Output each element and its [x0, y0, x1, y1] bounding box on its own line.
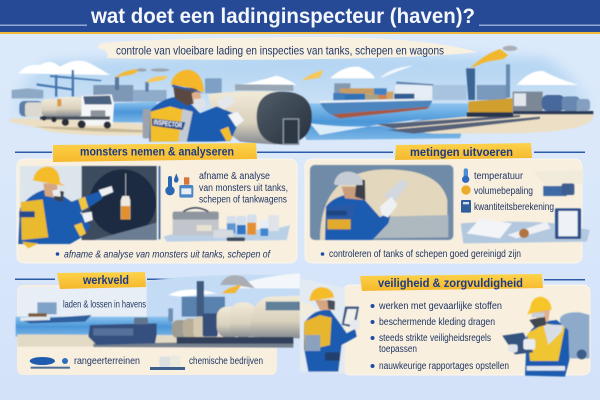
illustration: tank interior with worker: [310, 165, 453, 240]
subtitle banner: controle van vloeibare lading en inspecties van tanks, schepen en wagons: [116, 44, 444, 58]
hero inspector: [143, 70, 244, 142]
text: rangeerterreinen: rangeerterreinen: [74, 356, 140, 367]
hero illustration left: port and truck: [10, 61, 297, 135]
illustration: worker with tablet right: [502, 297, 589, 377]
banner: metingen uitvoeren: [395, 143, 532, 160]
illustration: sample case and bottles: [163, 208, 290, 242]
illustration: documents and instruments: [461, 170, 590, 243]
banner: werkveld: werkveld: [82, 273, 129, 287]
list: safety rules: beschermende kleding dragen: [379, 317, 495, 328]
list: safety rules: steeds strikte veiligheidsregels: [379, 333, 491, 344]
banner: monsters nemen & analyseren: [53, 143, 257, 162]
banner: werkveld: [57, 272, 146, 289]
clouds: [18, 61, 297, 85]
quay: [10, 118, 150, 135]
hero illustration right: ship, flare and train: [290, 46, 593, 140]
icons: thermometer, volume, calculator: [461, 168, 471, 213]
water: [112, 102, 157, 122]
panel background: [17, 275, 300, 375]
flares: [302, 46, 517, 81]
panel: werkveld: [15, 272, 300, 375]
text: measurements: temperatuur: [474, 171, 524, 182]
crane and refinery skyline: [12, 70, 222, 102]
bullet text: controleren: controleren of tanks of schepen goed gereinigd zijn: [329, 249, 521, 260]
flares: [115, 68, 169, 82]
storage tank with pipes: [208, 84, 312, 144]
panel: monsters nemen & analyseren: [15, 143, 300, 263]
list: safety rules: [370, 301, 509, 372]
banner: veiligheid & zorgvuldigheid: veiligheid & zorgvuldigheid: [378, 276, 523, 290]
water: [290, 103, 470, 140]
bullet text: afname: afname & analyse van monsters uit tanks, schepen of: [64, 250, 271, 260]
illustration: port scene with rail tankers: [16, 273, 300, 348]
banner: monsters nemen & analyseren: monsters nemen & analyseren: [80, 144, 234, 158]
icons: thermometer and flask: [165, 173, 193, 198]
text: afname & analyse: van monsters uit tanks,: [199, 183, 288, 194]
text: measurements: volumebepaling: [474, 186, 533, 197]
list: safety rules: nauwkeurige rapportages opstellen: [379, 361, 509, 372]
text: laden & lossen in havens: laden & lossen in havens: [63, 300, 146, 310]
text: chemische bedrijven: chemische bedrijven: [189, 356, 263, 367]
list: safety rules: toepassen: [379, 344, 417, 355]
hero inspector: INSPECTOR: [153, 117, 183, 130]
icon: rail locomotive: [30, 357, 70, 369]
illustration: worker with clipboard left: [300, 278, 359, 373]
train: [467, 92, 593, 117]
clouds: [330, 66, 578, 85]
container ship: [319, 82, 434, 118]
quay and tracks: [377, 113, 593, 134]
list: safety rules: werken met gevaarlijke stoffen: [378, 301, 502, 312]
text: afname & analyse: afname & analyse: [199, 171, 270, 182]
banner: metingen uitvoeren: metingen uitvoeren: [410, 145, 513, 159]
panel: veiligheid & zorgvuldigheid: [300, 274, 590, 377]
title: wat doet een ladinginspecteur (haven)?: [90, 5, 475, 28]
subtitle banner: [97, 37, 478, 60]
text: measurements: [474, 171, 554, 213]
header band: [0, 0, 600, 34]
skyline: [427, 64, 510, 100]
text: afname & analyse: [199, 171, 288, 206]
text: measurements: kwantiteitsberekening: [474, 202, 554, 213]
text: afname & analyse: schepen of tankwagens: [199, 194, 287, 206]
tanker truck: [19, 94, 114, 129]
illustration: sampling worker: [18, 166, 160, 248]
panel: metingen uitvoeren: [300, 143, 590, 263]
hero sky band: [12, 52, 592, 122]
icon: chemical tanks: [150, 356, 185, 370]
